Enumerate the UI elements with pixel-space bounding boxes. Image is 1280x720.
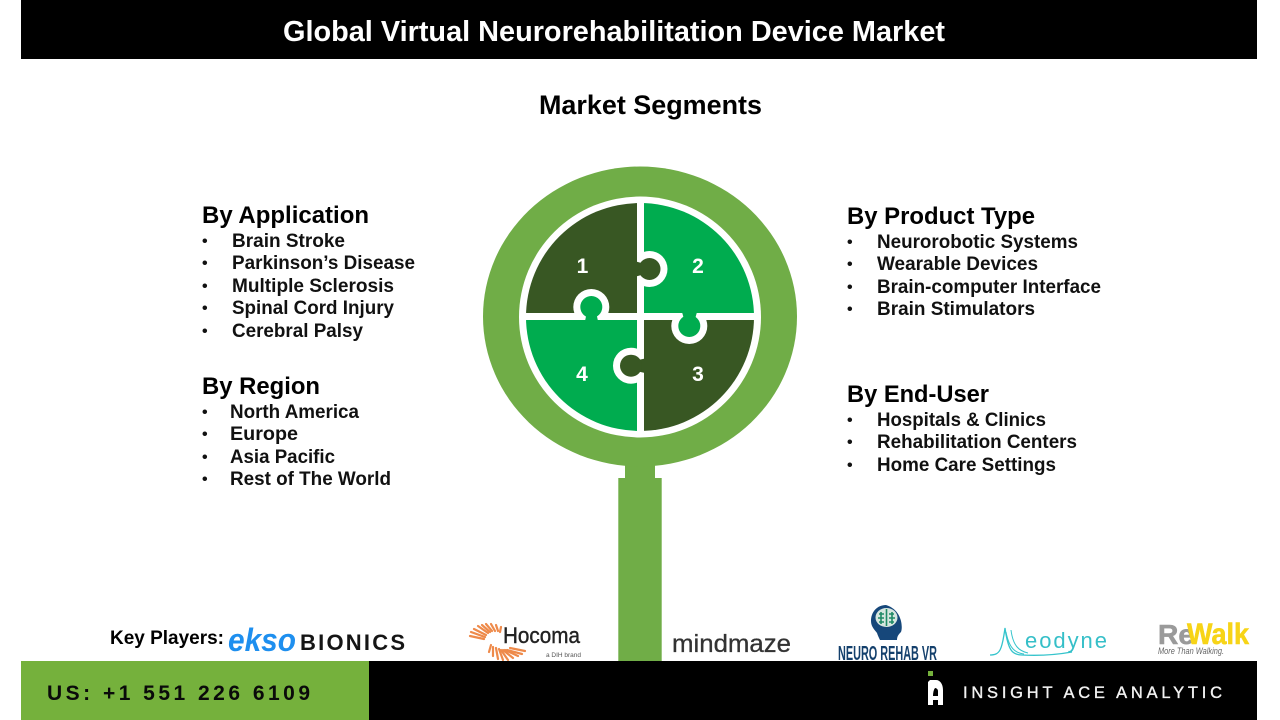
panel: by end-user: • (847, 412, 853, 429)
panel: by region: • (202, 404, 208, 421)
panel: by end-user: Hospitals & Clinics (877, 409, 1046, 431)
panel: by product type: Neurorobotic Systems (877, 231, 1078, 253)
panel: by region: Asia Pacific (230, 446, 335, 468)
company name: INSIGHT ACE ANALYTIC (963, 684, 1222, 702)
puzzle pieces (526, 203, 754, 431)
label: key players: Key Players: (110, 627, 224, 649)
panel: by product type: By Product Type (847, 203, 1035, 230)
panel: by application: Cerebral Palsy (232, 320, 363, 342)
heading: market segments: Market Segments (539, 90, 762, 120)
logo: ekso bionics: ekso (228, 622, 296, 658)
phone panel (21, 661, 369, 720)
panel: by region: • (202, 426, 208, 443)
logo: eodyne: eodyne (1025, 628, 1107, 653)
panel: by region: North America (230, 401, 359, 423)
puzzle numbers: 2 (692, 255, 704, 278)
title: Global Virtual Neurorehabilitation Device Market (283, 16, 945, 48)
logo: rewalk: Walk (1187, 618, 1249, 651)
phone number: US: +1 551 226 6109 (47, 682, 310, 705)
logo: hocoma (470, 623, 581, 660)
logo: neuro rehab vr: NEURO REHAB VR (838, 643, 937, 665)
panel: by application: • (202, 278, 208, 295)
icon: insight ace logo (928, 671, 943, 705)
puzzle numbers: 1 (577, 255, 589, 278)
panel: by application: • (202, 233, 208, 250)
panel: by product type: Brain-computer Interface (877, 276, 1101, 298)
panel: by region (202, 373, 391, 490)
logo: hocoma: a DIH brand (546, 652, 581, 659)
panel: by end-user: • (847, 457, 853, 474)
logo: hocoma: Hocoma (503, 623, 581, 648)
logo: neuro rehab vr (838, 605, 937, 665)
panel: by region: Europe (230, 423, 298, 445)
logo: ekso bionics (228, 622, 405, 658)
panel: by application: • (202, 323, 208, 340)
panel: by application: Spinal Cord Injury (232, 297, 394, 319)
panel: by product type: • (847, 234, 853, 251)
panel: by region: • (202, 471, 208, 488)
footer bar (21, 661, 1257, 720)
panel: by product type: Wearable Devices (877, 253, 1038, 275)
panel: by product type: • (847, 279, 853, 296)
panel: by product type: Brain Stimulators (877, 298, 1035, 320)
panel: by product type (847, 203, 1101, 320)
panel: by application: By Application (202, 202, 369, 229)
logo: eodyne (990, 628, 1107, 655)
panel: by end-user (847, 381, 1077, 476)
panel: by end-user: • (847, 434, 853, 451)
puzzle numbers (576, 255, 704, 386)
panel: by end-user: Home Care Settings (877, 454, 1056, 476)
header bar (21, 0, 1257, 59)
puzzle numbers: 4 (576, 363, 588, 386)
panel: by product type: • (847, 301, 853, 318)
logo: rewalk: More Than Walking. (1158, 646, 1224, 656)
panel: by end-user: By End-User (847, 381, 989, 408)
puzzle numbers: 3 (692, 363, 704, 386)
logo: rewalk: Re (1158, 619, 1194, 650)
panel: by application: Brain Stroke (232, 230, 345, 252)
magnifier ring (483, 166, 797, 466)
panel: by application: Parkinson’s Disease (232, 252, 415, 274)
logo: mindmaze: mindmaze (672, 630, 791, 658)
panel: by application: • (202, 255, 208, 272)
logo: ekso bionics: BIONICS (300, 630, 405, 655)
panel: by application (202, 202, 415, 342)
panel: by region: By Region (202, 373, 320, 400)
logo: rewalk (1158, 618, 1249, 656)
panel: by region: • (202, 449, 208, 466)
panel: by application: Multiple Sclerosis (232, 275, 394, 297)
magnifier puzzle graphic (483, 166, 797, 661)
panel: by product type: • (847, 256, 853, 273)
panel: by application: • (202, 300, 208, 317)
magnifier handle (618, 460, 662, 661)
panel: by region: Rest of The World (230, 468, 391, 490)
panel: by end-user: Rehabilitation Centers (877, 431, 1077, 453)
